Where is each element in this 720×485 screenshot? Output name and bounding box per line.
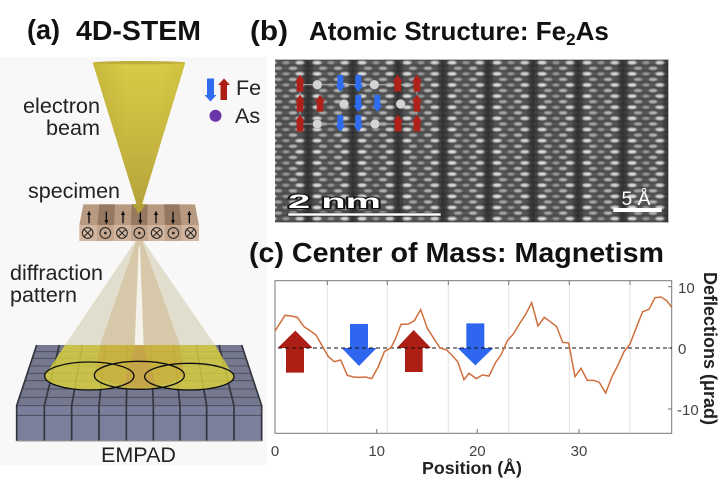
- scale bar: 2 nm: [288, 192, 441, 216]
- title atomic structure: Atomic Structure: Fe: [309, 16, 566, 46]
- x tick labels: [271, 443, 587, 460]
- title atomic structure: As: [576, 16, 609, 46]
- panel: 4D-STEM schematic: [16, 61, 262, 442]
- label: specimen: specimen: [28, 179, 120, 203]
- icon: As atom: [210, 110, 222, 122]
- x axis title: Position (Å): [422, 458, 522, 478]
- x tick labels: 10: [368, 443, 385, 460]
- panel: atomic resolution image: [275, 59, 669, 223]
- line chart: center of mass deflections: [271, 272, 720, 478]
- label: As: As: [235, 104, 260, 128]
- scale bar: 5 Å: [613, 187, 662, 212]
- specimen: [79, 204, 199, 241]
- x tick labels: 30: [571, 443, 587, 460]
- label: Fe: Fe: [236, 76, 261, 100]
- yellow beam footprint: [45, 345, 234, 390]
- title (b): (b): [250, 15, 288, 46]
- y tick labels: 0: [678, 341, 686, 358]
- label: EMPAD: EMPAD: [101, 443, 176, 467]
- title (a): (a): [27, 14, 60, 45]
- label: beam: beam: [46, 116, 100, 140]
- label: pattern: pattern: [10, 283, 77, 307]
- y axis title: Deflections (μrad): [700, 272, 720, 425]
- y tick labels: [677, 280, 699, 419]
- magnetization arrows: [278, 323, 493, 373]
- scale bar: 5 Å: 5 Å: [622, 187, 650, 210]
- plot frame and grid: [275, 281, 672, 433]
- icon: red up arrow: [218, 78, 230, 100]
- icon: blue down arrow: [204, 78, 216, 102]
- label: diffraction: diffraction: [10, 261, 103, 285]
- cone tip over specimen: [132, 204, 146, 214]
- electron beam cone: [93, 61, 185, 213]
- zero line: [278, 347, 672, 349]
- title 4D-STEM: 4D-STEM: [76, 15, 201, 46]
- x tick labels: 0: [271, 443, 279, 460]
- label: electron: electron: [23, 94, 100, 118]
- EMPAD detector: [0, 345, 267, 441]
- title atomic structure: 2: [566, 30, 576, 49]
- diffraction beams: [65, 240, 215, 345]
- y tick labels: 10: [678, 280, 695, 297]
- legend: Fe and As: [204, 76, 261, 128]
- diffraction disks: [45, 361, 234, 390]
- scale bar: 2 nm: 2 nm: [288, 192, 381, 213]
- y tick labels: -10: [677, 402, 699, 419]
- title (c): (c) Center of Mass: Magnetism: [249, 237, 664, 268]
- atom overlay: [295, 75, 422, 132]
- x tick labels: 20: [469, 443, 486, 460]
- deflection curve: [275, 297, 672, 393]
